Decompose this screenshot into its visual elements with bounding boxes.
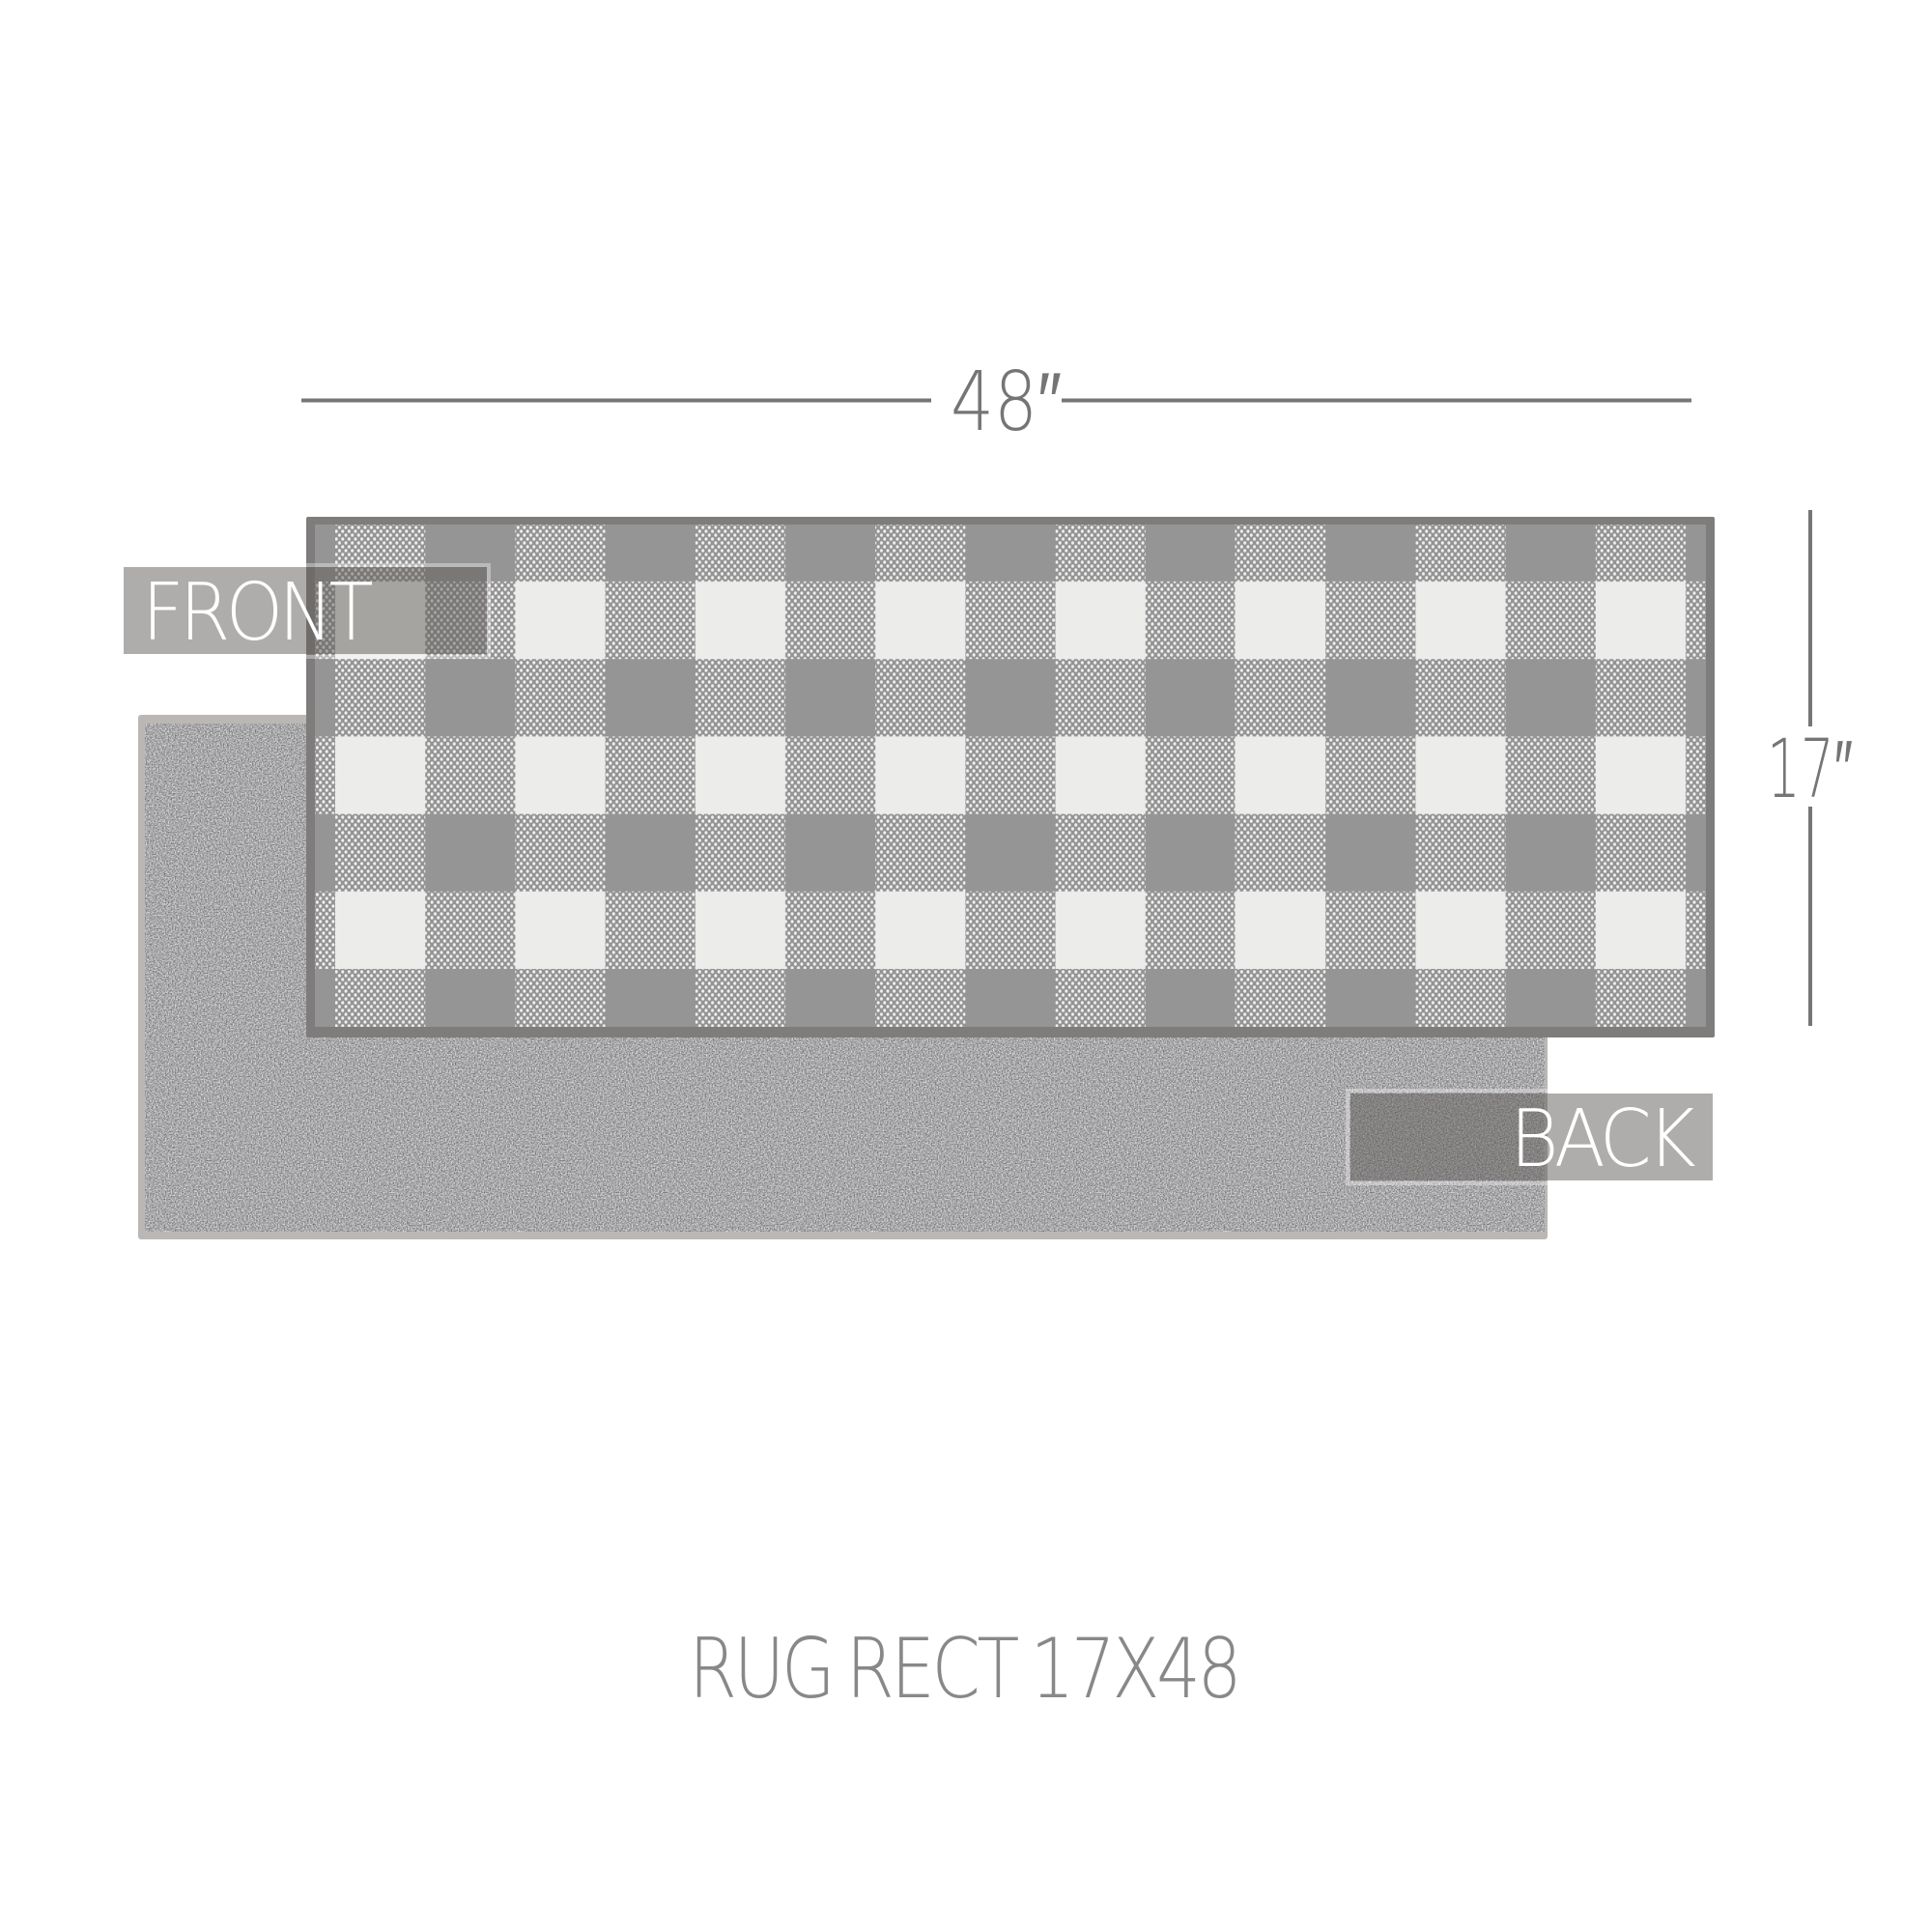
product title: RUG RECT 17X48 [689, 1621, 1238, 1718]
front of rug: buffalo check [306, 517, 1715, 1037]
width dimension: 48 inches [301, 355, 1691, 450]
back label halo [1348, 1091, 1715, 1183]
width line right [1062, 398, 1691, 402]
back label panel [1350, 1094, 1713, 1180]
back rug textured surface [145, 724, 1545, 1232]
front label text: FRONT [142, 567, 373, 659]
back label [1348, 1091, 1715, 1185]
front label [122, 565, 489, 659]
width value: 48″ [951, 355, 1062, 450]
front rug binding edge [306, 517, 1715, 1037]
height value: 17″ [1767, 722, 1853, 816]
height line bottom [1808, 807, 1812, 1026]
front rug woven base [315, 525, 1706, 1027]
height dimension: 17 inches [1767, 510, 1853, 1026]
front label panel [124, 567, 487, 654]
woven dot texture [315, 525, 1706, 1027]
height line top [1808, 510, 1812, 726]
back of rug [138, 715, 1548, 1239]
back rug binding edge [138, 715, 1548, 1239]
width line left [301, 398, 931, 402]
front label halo [122, 565, 489, 657]
back label text: BACK [1510, 1094, 1695, 1185]
check squares [315, 525, 1706, 1027]
